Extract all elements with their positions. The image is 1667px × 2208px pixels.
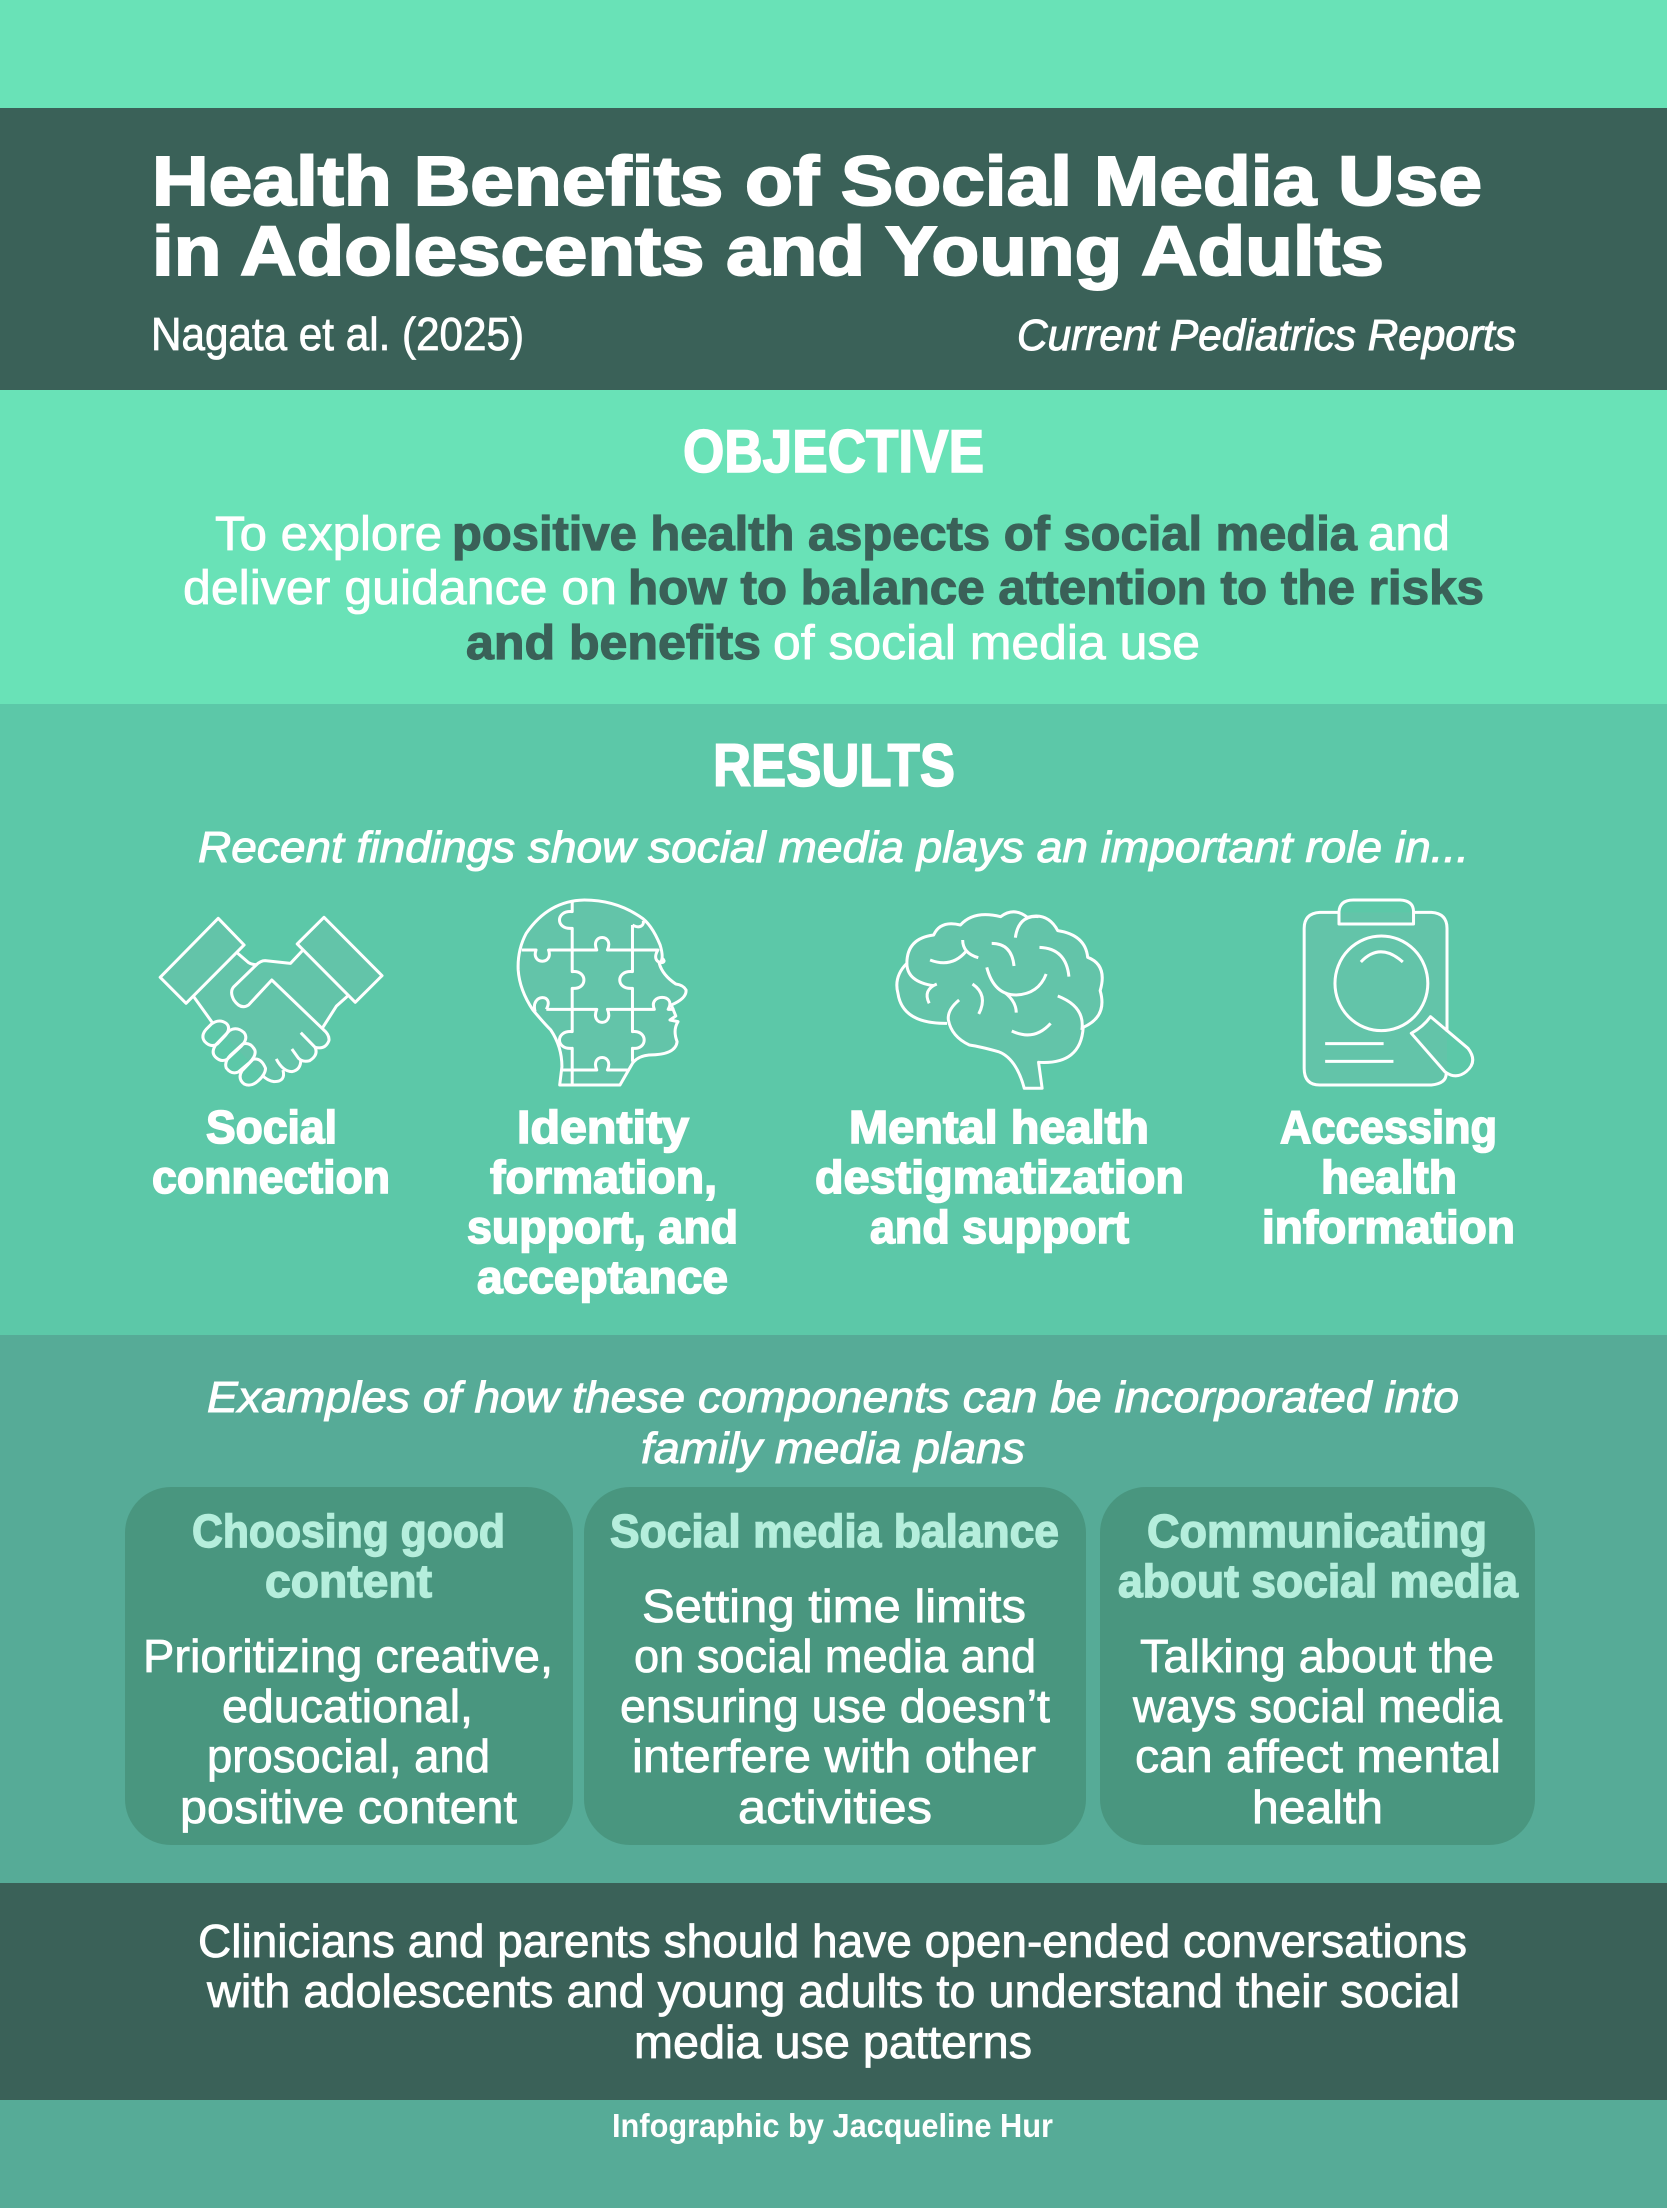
results subheading: Recent findings show social media plays an important role in...	[198, 823, 1469, 872]
examples heading: Examples of how these components can be incorporated into	[207, 1373, 1459, 1422]
objective text: how to balance attention to the risks	[628, 562, 1484, 615]
card: choosing good content: Choosing good	[192, 1505, 505, 1557]
footer	[0, 2100, 1667, 2208]
icon: brain	[897, 912, 1102, 1088]
card: communicating about social media: Talking about the	[1140, 1630, 1494, 1682]
label: social connection: Social	[206, 1101, 337, 1153]
objective text: positive health aspects of social media	[452, 508, 1357, 561]
icon: handshake	[160, 917, 382, 1085]
label: mental health	[815, 1101, 1184, 1253]
card: social media balance: interfere with other	[632, 1730, 1036, 1782]
label: identity formation: acceptance	[477, 1251, 728, 1303]
label: mental health: destigmatization	[815, 1151, 1184, 1203]
icon: clipboard with magnifier	[1304, 900, 1473, 1085]
label: identity formation: formation,	[490, 1151, 717, 1203]
card: choosing good content	[125, 1487, 573, 1845]
objective text: To explore	[215, 508, 442, 561]
panel: results	[0, 704, 1667, 1335]
objective text: of social media use	[773, 617, 1200, 670]
card: communicating about social media: ways social media	[1132, 1680, 1502, 1732]
label: social connection	[152, 1101, 390, 1203]
panel: conclusion: media use patterns	[634, 2016, 1032, 2068]
card: social media balance: Setting time limits	[642, 1580, 1026, 1632]
journal: Current Pediatrics Reports	[1017, 311, 1516, 360]
card: social media balance: ensuring use doesn’t	[620, 1680, 1050, 1732]
card: choosing good content: prosocial, and	[207, 1730, 490, 1782]
title: Health Benefits of Social Media Use	[152, 142, 1482, 220]
objective text: and benefits	[466, 617, 761, 670]
objective text: deliver guidance on	[183, 562, 617, 615]
credit: Infographic by Jacqueline Hur	[612, 2107, 1053, 2144]
label: accessing health information: information	[1262, 1201, 1515, 1253]
label: identity formation: Identity	[517, 1101, 689, 1153]
card: social media balance: Social media balance	[610, 1505, 1059, 1557]
card: social media balance: activities	[738, 1781, 932, 1833]
card: communicating about social media: health	[1252, 1781, 1383, 1833]
card: communicating about social media: about social media	[1118, 1555, 1518, 1607]
label: accessing health information	[1262, 1101, 1515, 1253]
examples heading: family media plans	[641, 1424, 1025, 1473]
label: mental health: Mental health	[849, 1101, 1149, 1153]
panel: objective	[0, 390, 1667, 704]
card: social media balance: on social media and	[634, 1630, 1036, 1682]
card: communicating about social media: Communicating	[1147, 1505, 1487, 1557]
card: choosing good content: Prioritizing creative,	[143, 1630, 553, 1682]
card: communicating about social media: can affect mental	[1135, 1730, 1501, 1782]
card: choosing good content: content	[265, 1555, 432, 1607]
objective heading: OBJECTIVE	[683, 418, 984, 485]
header panel	[0, 108, 1667, 390]
card: social media balance	[584, 1487, 1086, 1845]
card: choosing good content: educational,	[222, 1680, 473, 1732]
top band	[0, 0, 1667, 108]
examples heading	[207, 1373, 1459, 1473]
authors: Nagata et al. (2025)	[151, 308, 524, 360]
label: social connection: connection	[152, 1151, 390, 1203]
card: communicating about social media	[1100, 1487, 1535, 1845]
icon: puzzle head	[518, 900, 686, 1085]
results heading: RESULTS	[713, 732, 955, 799]
objective text	[183, 508, 1484, 670]
title: in Adolescents and Young Adults	[152, 212, 1384, 290]
objective text: and	[1368, 508, 1450, 561]
label: accessing health information: Accessing	[1280, 1101, 1497, 1153]
panel: conclusion: with adolescents and young adults to understand their social	[206, 1965, 1460, 2017]
label: accessing health information: health	[1321, 1151, 1457, 1203]
label: mental health: and support	[870, 1201, 1129, 1253]
card: choosing good content: positive content	[180, 1781, 517, 1833]
title	[152, 142, 1482, 290]
panel: conclusion: Clinicians and parents should have open-ended conversations	[198, 1915, 1467, 1967]
panel: examples	[0, 1335, 1667, 1883]
panel: conclusion	[0, 1883, 1667, 2100]
label: identity formation	[467, 1101, 738, 1303]
label: identity formation: support, and	[467, 1201, 738, 1253]
